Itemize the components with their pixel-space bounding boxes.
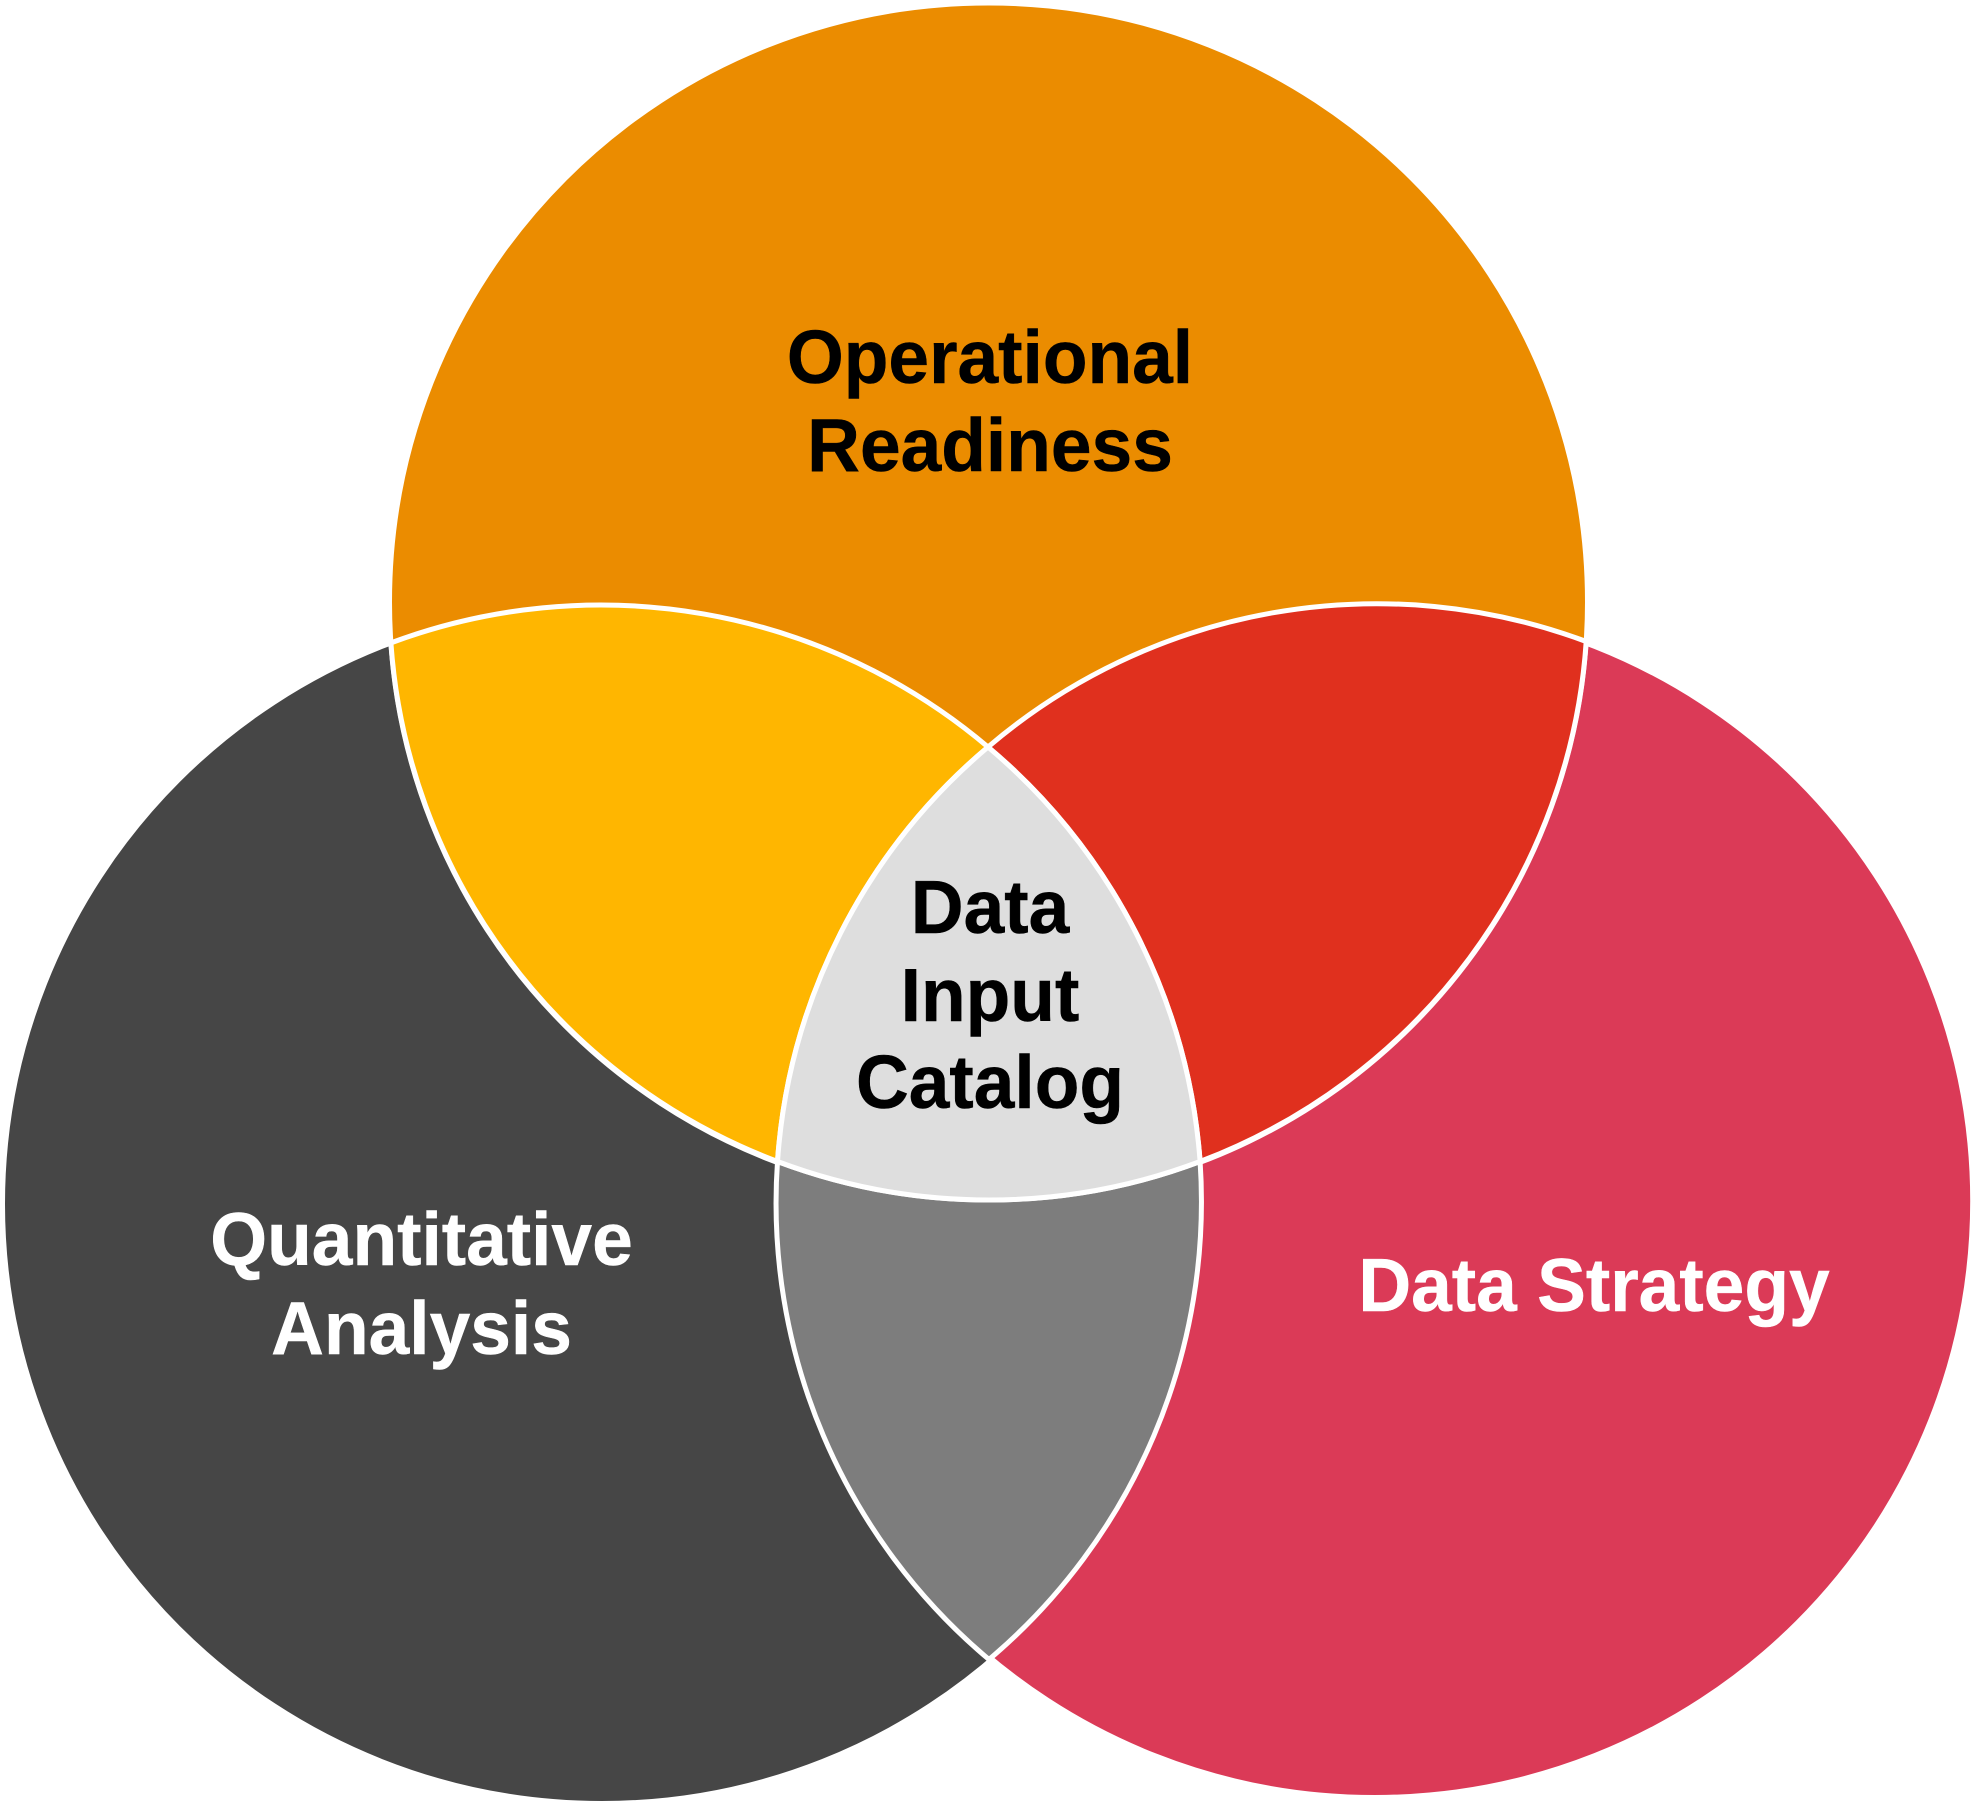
label: data strategy: Data Strategy bbox=[1358, 1243, 1830, 1327]
label: quantitative analysis: Analysis bbox=[271, 1286, 572, 1370]
label: operational readiness: Operational bbox=[787, 315, 1193, 399]
overlap: operational and quantitative bbox=[391, 605, 988, 1162]
label: quantitative analysis: Quantitative bbox=[210, 1197, 633, 1281]
label: data input catalog: Input bbox=[901, 953, 1079, 1037]
label: operational readiness: Readiness bbox=[807, 403, 1173, 487]
label: data input catalog: Catalog bbox=[856, 1040, 1124, 1124]
overlap: quantitative and strategy bbox=[776, 1162, 1201, 1660]
circle: operational readiness bbox=[390, 3, 1588, 1201]
center overlap: data input catalog bbox=[778, 747, 1200, 1200]
circle: data strategy bbox=[777, 604, 1973, 1798]
label: data input catalog: Data bbox=[911, 865, 1070, 949]
overlap: operational and strategy bbox=[988, 604, 1586, 1162]
circle: quantitative analysis bbox=[2, 604, 1202, 1804]
